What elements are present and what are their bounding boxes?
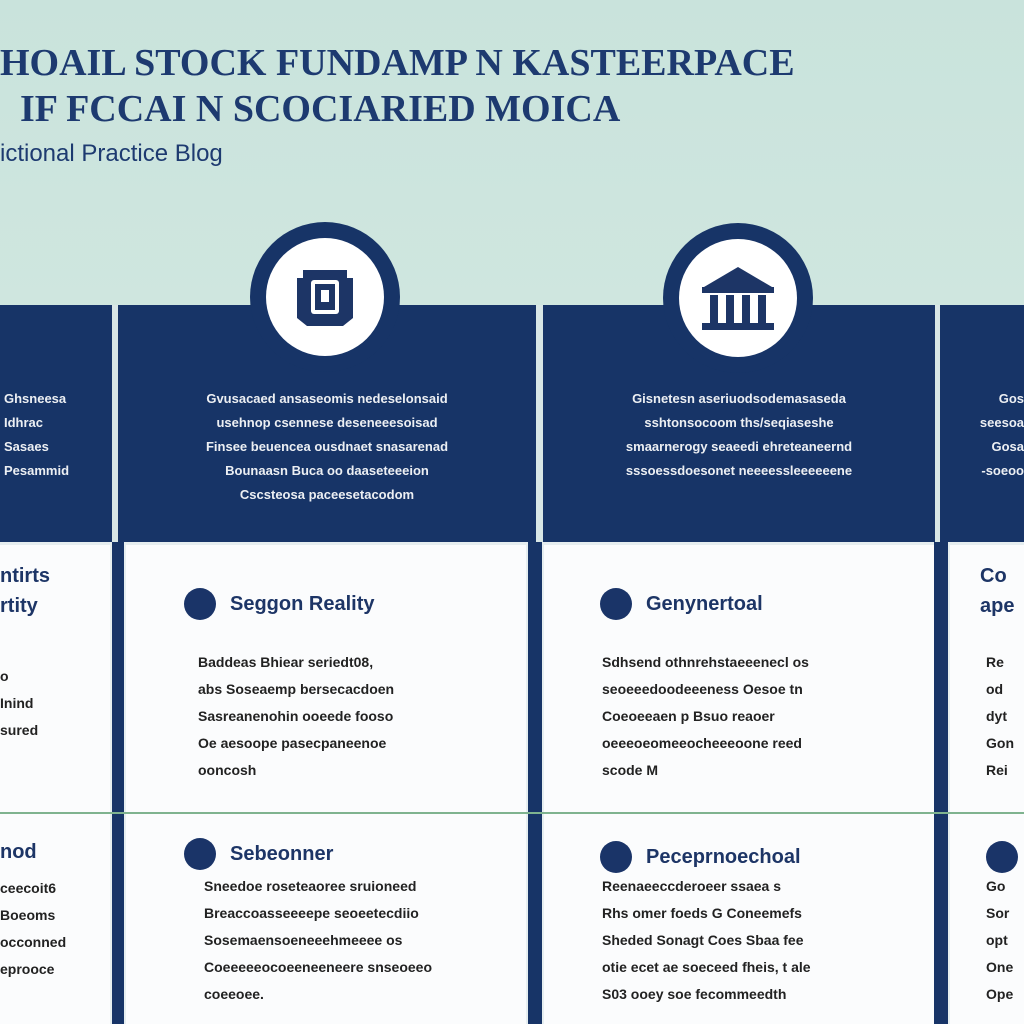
text block: Baddeas Bhiear seriedt08, (198, 654, 373, 670)
text block: seoeeedoodeeeness Oesoe tn (602, 681, 803, 697)
panel: band col4: Gos (999, 391, 1024, 406)
text block (602, 878, 811, 1002)
heading: Peceprnoechoal (646, 846, 801, 868)
text block: Coeeeeeocoeeneeneere snseoeeo (204, 959, 432, 975)
panel: band col1: Ghsneesa (4, 391, 66, 406)
text block: abs Soseaemp bersecacdoen (198, 681, 394, 697)
panel: band col1: Pesammid (4, 463, 69, 478)
text block (198, 654, 394, 778)
panel: card col1: occonned (0, 934, 66, 950)
text block: Reenaeeccderoeer ssaea s (602, 878, 781, 894)
panel: card col1: Inind (0, 695, 33, 711)
text block: coeeoee. (204, 986, 264, 1002)
dividers (0, 812, 1024, 814)
text block: S03 ooey soe fecommeedth (602, 986, 786, 1002)
panel: band col2: usehnop csennese deseneeesoisad (216, 415, 438, 430)
separators (112, 542, 124, 1024)
text block: Breaccoasseeeepe seoeetecdiio (204, 905, 419, 921)
heading: Segean Reality (184, 588, 374, 620)
panel: band col1 (0, 305, 112, 542)
panel: card col1 (0, 545, 110, 1024)
panel: card col1: nod (0, 841, 37, 863)
panel: card col4: Gon (986, 735, 1014, 751)
icon: circle shield (250, 222, 400, 372)
panel: band col3: sssoessdoesonet neeeessleeeeeene (626, 463, 852, 478)
title: IF FCCAI N SCOCIARIED MOICA (20, 88, 620, 130)
panel: band col2: Gvusacaed ansaseomis nedeselonsaid (206, 391, 448, 406)
panel: card col2 (126, 545, 526, 1024)
panel: band col3 (543, 305, 935, 542)
panel: card col4: Rei (986, 762, 1008, 778)
heading (600, 841, 801, 873)
panel: band col1: Idhrac (4, 415, 43, 430)
panel: band col4: -soeoo (981, 463, 1024, 478)
text block: scode M (602, 762, 658, 778)
heading: Sebeomer: Sebeonner (230, 842, 333, 864)
title (0, 42, 795, 130)
panel: card col4: One (986, 959, 1013, 975)
subtitle: ictional Practice Blog (0, 140, 223, 167)
panel: band col4 (940, 305, 1024, 542)
icon: circle bank (663, 223, 813, 373)
panel: card col3 (544, 545, 934, 1024)
text block: Sneedoe roseteaoree sruioneed (204, 878, 416, 894)
panel: band col2: Finsee beuencea ousdnaet snasarenad (206, 439, 448, 454)
heading: Sebeomer (184, 838, 334, 870)
panel: band col3: smaarnerogy seaeedi ehreteaneernd (626, 439, 852, 454)
panel: band col1: Sasaes (4, 439, 49, 454)
panel: card col1: Boeoms (0, 907, 55, 923)
panel: band col2: Cscsteosa paceesetacodom (240, 487, 414, 502)
panel: band col4: Gosa (991, 439, 1024, 454)
panel: card col1: ceecoit6 (0, 880, 56, 896)
panel: band col3: sshtonsocoom ths/seqiaseshe (644, 415, 834, 430)
panel: card col4: dyt (986, 708, 1007, 724)
title: HOAIL STOCK FUNDAMP N KASTEERPACE (0, 42, 795, 84)
panel: card col4: Go (986, 878, 1005, 894)
text block: Sheded Sonagt Coes Sbaa fee (602, 932, 804, 948)
panel: card col1: o (0, 668, 9, 684)
text block: Coeoeeaen p Bsuo reaoer (602, 708, 775, 724)
panel: card col1: eprooce (0, 961, 54, 977)
heading: Genynertoal (646, 592, 763, 614)
text block (602, 654, 809, 778)
navy band (0, 305, 1024, 542)
text block: otie ecet ae soeceed fheis, t ale (602, 959, 811, 975)
panel: card col4: ape (980, 595, 1014, 617)
panel: band col4: seesoa (980, 415, 1024, 430)
text block: oeeeoeomeeocheeeoone reed (602, 735, 802, 751)
text block: ooncosh (198, 762, 256, 778)
panel: band col2 (118, 305, 536, 542)
heading: Segean Reality: Seggon Reality (230, 592, 374, 614)
text block: Sosemaensoeneeehmeeee os (204, 932, 402, 948)
panel: card col4: Ope (986, 986, 1013, 1002)
panel: card col4: Co (980, 565, 1007, 587)
panel: card col4 (950, 545, 1024, 1024)
panel: card col1: ntirts (0, 565, 50, 587)
text block: Oe aesoope pasecpaneenoe (198, 735, 386, 751)
text block: Sasreanenohin ooeede fooso (198, 708, 393, 724)
panel: card col4: opt (986, 932, 1008, 948)
heading (600, 588, 763, 620)
text block (204, 878, 432, 1002)
panel: band col3: Gisnetesn aseriuodsodemasaseda (632, 391, 846, 406)
panel: card col4: Sor (986, 905, 1009, 921)
panel: card col4: od (986, 681, 1003, 697)
text block: Sdhsend othnrehstaeeenecl os (602, 654, 809, 670)
panel: band col2: Bounaasn Buca oo daaseteeeion (225, 463, 429, 478)
panel: card col4: Re (986, 654, 1004, 670)
panel: card col1: rtity (0, 595, 38, 617)
panel: card col1: sured (0, 722, 38, 738)
text block: Rhs omer foeds G Coneemefs (602, 905, 802, 921)
